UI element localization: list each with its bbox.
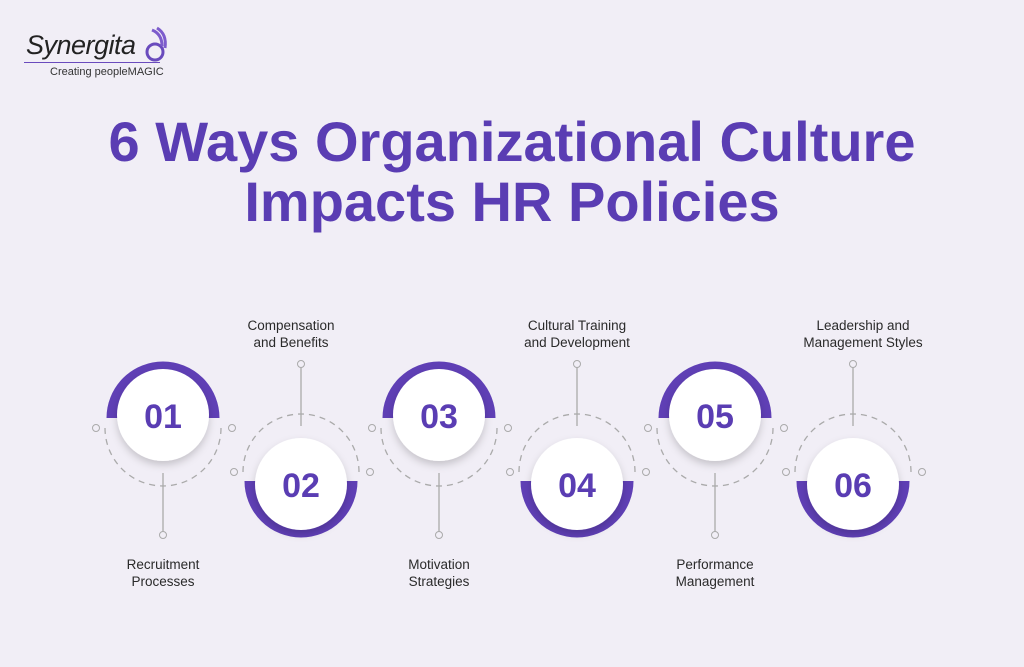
step 05: 05	[696, 398, 734, 436]
label 04: Cultural Training	[528, 318, 626, 333]
step 02: 02	[282, 467, 320, 505]
label 02: Compensation	[247, 318, 335, 333]
step 02	[230, 360, 374, 532]
logo	[24, 26, 167, 78]
step 03: 03	[420, 398, 458, 436]
title: 6 Ways Organizational Culture	[109, 110, 915, 173]
step 06	[782, 360, 926, 532]
label 01: Processes	[131, 574, 195, 589]
step 04	[506, 360, 650, 532]
title	[109, 110, 915, 233]
label 05	[676, 557, 754, 589]
label 06: Leadership and	[816, 318, 910, 333]
label 05: Management	[676, 574, 754, 589]
step 01	[92, 367, 236, 538]
step 06: 06	[834, 467, 872, 505]
label 01	[127, 557, 200, 589]
label 04: and Development	[524, 335, 630, 350]
title: Impacts HR Policies	[244, 170, 780, 233]
logo: Creating peopleMAGIC	[50, 66, 164, 78]
step 04: 04	[558, 467, 596, 505]
label 05: Performance	[676, 557, 754, 572]
label 03: Motivation	[408, 557, 470, 572]
label 02	[247, 318, 335, 350]
step 05	[644, 367, 788, 538]
label 06	[803, 318, 923, 350]
label 02: and Benefits	[253, 335, 329, 350]
step 01: 01	[144, 398, 182, 436]
label 04	[524, 318, 630, 350]
logo: Synergita	[26, 30, 136, 60]
label 03	[408, 557, 470, 589]
label 06: Management Styles	[803, 335, 923, 350]
step 03	[368, 367, 512, 538]
label 01: Recruitment	[127, 557, 199, 572]
label 03: Strategies	[409, 574, 469, 589]
